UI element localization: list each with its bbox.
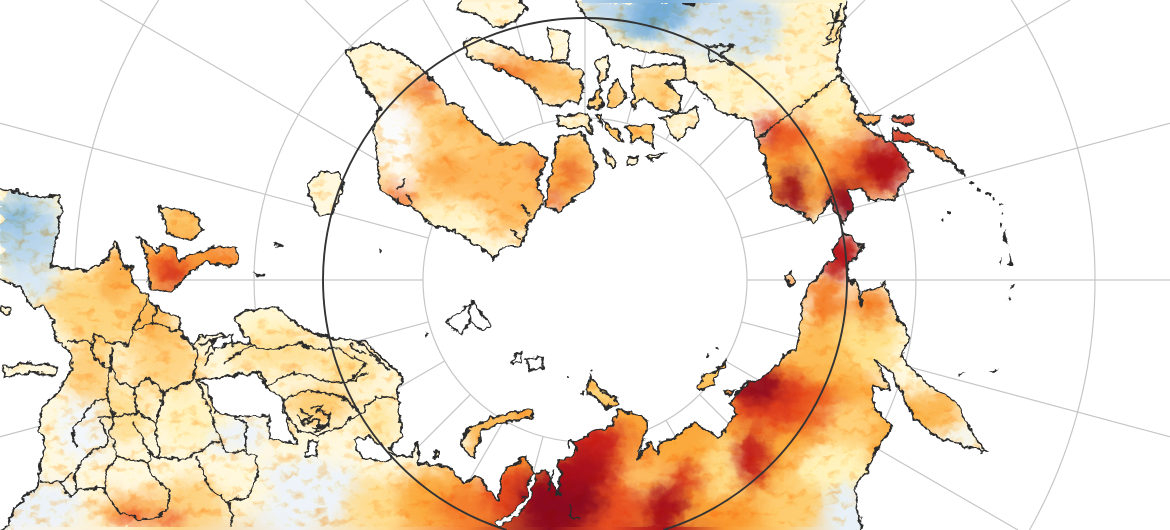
- small islands and dots: [253, 0, 1016, 394]
- outline: ellesmere: [463, 37, 583, 107]
- outer pale islands: [464, 410, 532, 440]
- outline: island group north west: [160, 207, 203, 242]
- west: pale and blue: [0, 193, 61, 277]
- alaska warm: [783, 79, 847, 131]
- outline: arctic archipelago: [545, 27, 698, 210]
- ob gulf channel: [499, 475, 534, 523]
- outline: aleutian peninsula: [857, 113, 967, 177]
- country borders: [40, 75, 840, 530]
- polar island scribbles: [446, 46, 733, 370]
- greenland: [355, 105, 555, 225]
- outline: eurasia: [0, 185, 986, 530]
- outline: small western islands: [2, 306, 56, 377]
- outline: novaya zemlya: [461, 410, 532, 457]
- outline: island group west: [138, 237, 238, 292]
- arctic isles: [471, 56, 559, 88]
- canada blue: [595, 0, 735, 38]
- outline: iceland: [308, 173, 345, 217]
- europe warm: [48, 267, 172, 343]
- fjord scribbles: [200, 4, 846, 518]
- outline: arctic islands: [434, 272, 795, 457]
- outline: top island: [457, 0, 527, 27]
- inland seas: [197, 335, 394, 462]
- outline: north america: [575, 0, 913, 225]
- outline: greenland: [345, 42, 547, 260]
- siberia: [470, 350, 930, 530]
- frame edge land strips: [14, 0, 856, 530]
- arctic circle: [323, 18, 847, 530]
- svalbard style islands: [160, 208, 201, 252]
